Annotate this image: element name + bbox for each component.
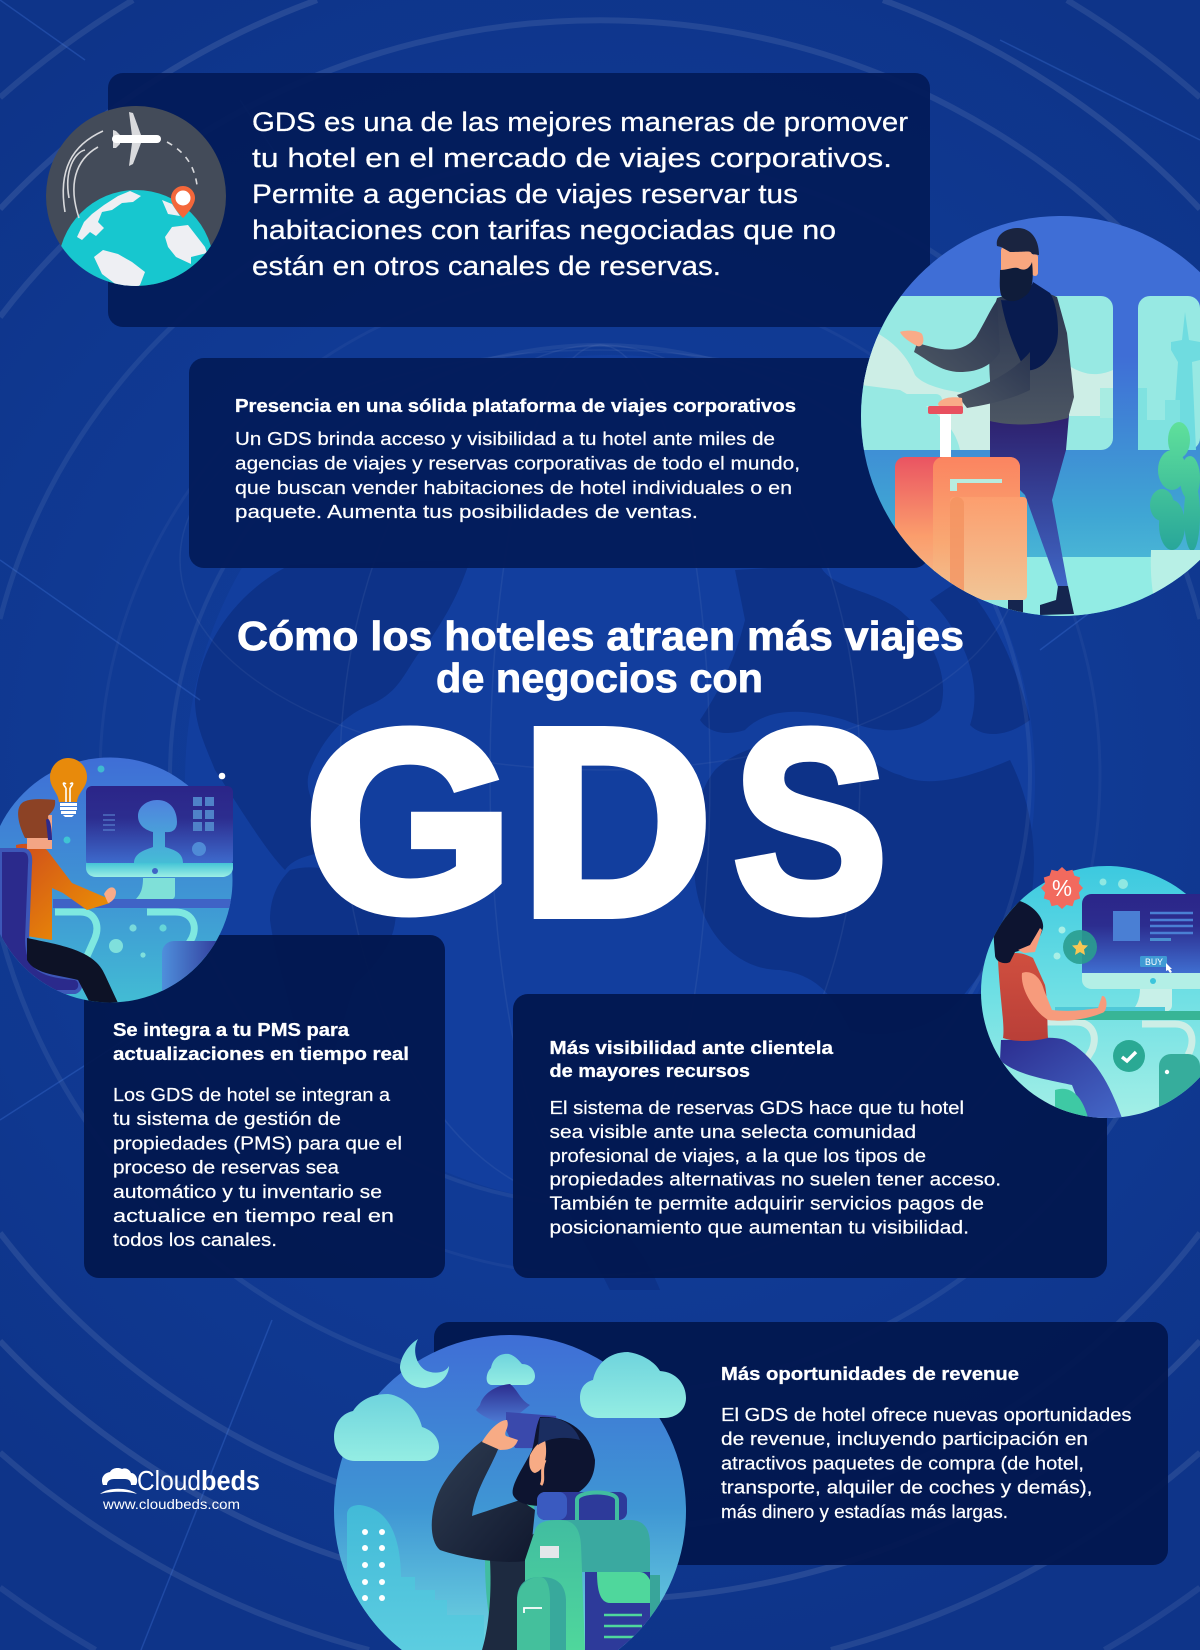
window right [1138, 296, 1200, 450]
panel: corporate platform card background [189, 358, 929, 568]
text: revenue [721, 1364, 1132, 1522]
intro text: tu hotel en el mercado de viajes corporativos. [252, 143, 892, 173]
binoculars [476, 1384, 560, 1448]
text: PMS integration: tu sistema de gestión de [113, 1109, 341, 1129]
buy button: BUY [1145, 957, 1163, 967]
text: revenue: El GDS de hotel ofrece nuevas oportunidades [721, 1405, 1132, 1425]
intro text: habitaciones con tarifas negociadas que no [252, 215, 836, 245]
text: visibility: posicionamiento que aumentan tu visibilidad. [550, 1218, 969, 1238]
icon: cloud bed [100, 1468, 137, 1494]
monitor [1082, 894, 1200, 989]
cloud right [580, 1352, 686, 1418]
wheels [989, 602, 1008, 609]
window left [850, 296, 1113, 450]
text: PMS integration: todos los canales. [113, 1230, 277, 1250]
arm on handle [957, 352, 1030, 408]
head [513, 1417, 595, 1506]
desk [53, 899, 233, 908]
panel: PMS card background [84, 935, 445, 1278]
icon: percent badge [1041, 867, 1083, 909]
sweater [989, 287, 1074, 424]
text: PMS integration [113, 1020, 409, 1250]
intro text: Permite a agencias de viajes reservar tus [252, 179, 798, 209]
title: big GDS: G [305, 678, 513, 965]
title: big GDS [305, 674, 887, 971]
decorative dot [219, 773, 225, 779]
logo: Cloudbeds: Cloud [137, 1465, 201, 1496]
text: visibility: Más visibilidad ante clientela [550, 1038, 834, 1058]
cloud small [487, 1354, 535, 1385]
tablet [1159, 1054, 1200, 1107]
text: PMS integration: propiedades (PMS) para que el [113, 1134, 402, 1154]
intro text: GDS es una de las mejores maneras de promover [252, 107, 908, 137]
monitor stand [135, 878, 175, 900]
title: big GDS: S [734, 678, 887, 965]
suitcase [895, 457, 1027, 601]
title: big GDS: D [521, 674, 712, 971]
illustration: traveller with suitcase [850, 216, 1200, 620]
text: visibility: También te permite adquirir servicios pagos de [550, 1194, 984, 1214]
text: corporate platform: paquete. Aumenta tus posibilidades de ventas. [235, 502, 698, 522]
backpack [517, 1520, 660, 1650]
text: PMS integration: actualizaciones en tiempo real [113, 1044, 409, 1064]
monitor [86, 786, 233, 877]
icon: light bulb [50, 758, 87, 817]
text: corporate platform: agencias de viajes y reservas corporativas de todo el mundo, [235, 454, 800, 474]
plant [1150, 422, 1200, 594]
title: Cómo los hoteles atraen más viajes [237, 613, 964, 659]
text: revenue: Más oportunidades de revenue [721, 1364, 1019, 1384]
icon: moon [400, 1339, 449, 1388]
bedroll [537, 1492, 627, 1520]
world map backdrop [185, 355, 1035, 1290]
suitcase handle [940, 412, 951, 458]
cloud left [334, 1394, 439, 1461]
pants [1000, 1038, 1122, 1118]
title [237, 613, 964, 701]
text: revenue: más dinero y estadías más largas. [721, 1502, 1008, 1522]
text: revenue: atractivos paquetes de compra (de hotel, [721, 1454, 1084, 1474]
tablet [162, 941, 216, 991]
monitor stand [1135, 989, 1172, 1011]
strap [485, 1500, 535, 1640]
hand [482, 1420, 518, 1450]
text: corporate platform: que buscan vender habitaciones de hotel individuales o en [235, 478, 792, 498]
legs [27, 938, 118, 1003]
floor [919, 557, 1200, 616]
text: PMS integration: Se integra a tu PMS para [113, 1020, 350, 1040]
pants [990, 415, 1069, 587]
text: corporate platform: Un GDS brinda acceso y visibilidad a tu hotel ante miles de [235, 429, 775, 449]
logo: Cloudbeds: www.cloudbeds.com [102, 1496, 240, 1512]
building [347, 1505, 484, 1650]
text: visibility: El sistema de reservas GDS hace que tu hotel [550, 1098, 964, 1118]
text: revenue: de revenue, incluyendo participación en [721, 1429, 1088, 1449]
desk curves [55, 908, 198, 958]
text: revenue: transporte, alquiler de coches y demás), [721, 1478, 1092, 1498]
hand [104, 887, 116, 903]
hair [994, 900, 1043, 963]
hand on handle [938, 397, 963, 408]
intro text: están en otros canales de reservas. [252, 251, 721, 281]
desk curves [1047, 1020, 1196, 1060]
text: visibility: profesional de viajes, a la que los tipos de [550, 1146, 926, 1166]
head [997, 228, 1039, 301]
torso [16, 844, 110, 940]
text: visibility: propiedades alternativas no suelen tener acceso. [550, 1170, 1001, 1190]
on-screen person [134, 800, 183, 863]
text: PMS integration: Los GDS de hotel se integran a [113, 1085, 391, 1105]
illustration: woman buying online [981, 866, 1200, 1118]
text: visibility [550, 1038, 1001, 1238]
intro text [252, 107, 908, 281]
title: de negocios con [436, 655, 763, 701]
panel: revenue card background [434, 1322, 1168, 1565]
text: PMS integration: actualice en tiempo real en [113, 1206, 394, 1226]
text: PMS integration: proceso de reservas sea [113, 1158, 340, 1178]
icon: check badge [1113, 1040, 1145, 1072]
logo: Cloudbeds [100, 1465, 260, 1512]
arm [432, 1441, 535, 1562]
illustration: agent at computer [0, 758, 233, 1003]
text: corporate platform: Presencia en una sólida plataforma de viajes corporativos [235, 396, 796, 416]
text: PMS integration: automático y tu inventario se [113, 1182, 382, 1202]
icon: percent badge: % [1052, 875, 1072, 901]
logo: Cloudbeds: beds [201, 1465, 260, 1496]
text: visibility: sea visible ante una selecta comunidad [550, 1122, 916, 1142]
panel: visibility card background [513, 994, 1107, 1278]
top [998, 953, 1048, 1041]
text: corporate platform [235, 396, 800, 522]
arm [1022, 972, 1106, 1021]
icon: globe and plane [46, 106, 226, 286]
chair [0, 850, 80, 992]
desk [1074, 1011, 1200, 1020]
shoe [1040, 586, 1074, 615]
text: visibility: de mayores recursos [550, 1061, 750, 1081]
illustration: backpacker with binoculars [334, 1335, 686, 1650]
panel: intro card background [108, 73, 930, 327]
hand raised [900, 331, 923, 346]
torso [482, 1530, 540, 1650]
head [18, 799, 55, 849]
decorative bubbles [109, 924, 167, 958]
icon: star badge [1063, 930, 1097, 964]
arm raised [914, 300, 1000, 372]
